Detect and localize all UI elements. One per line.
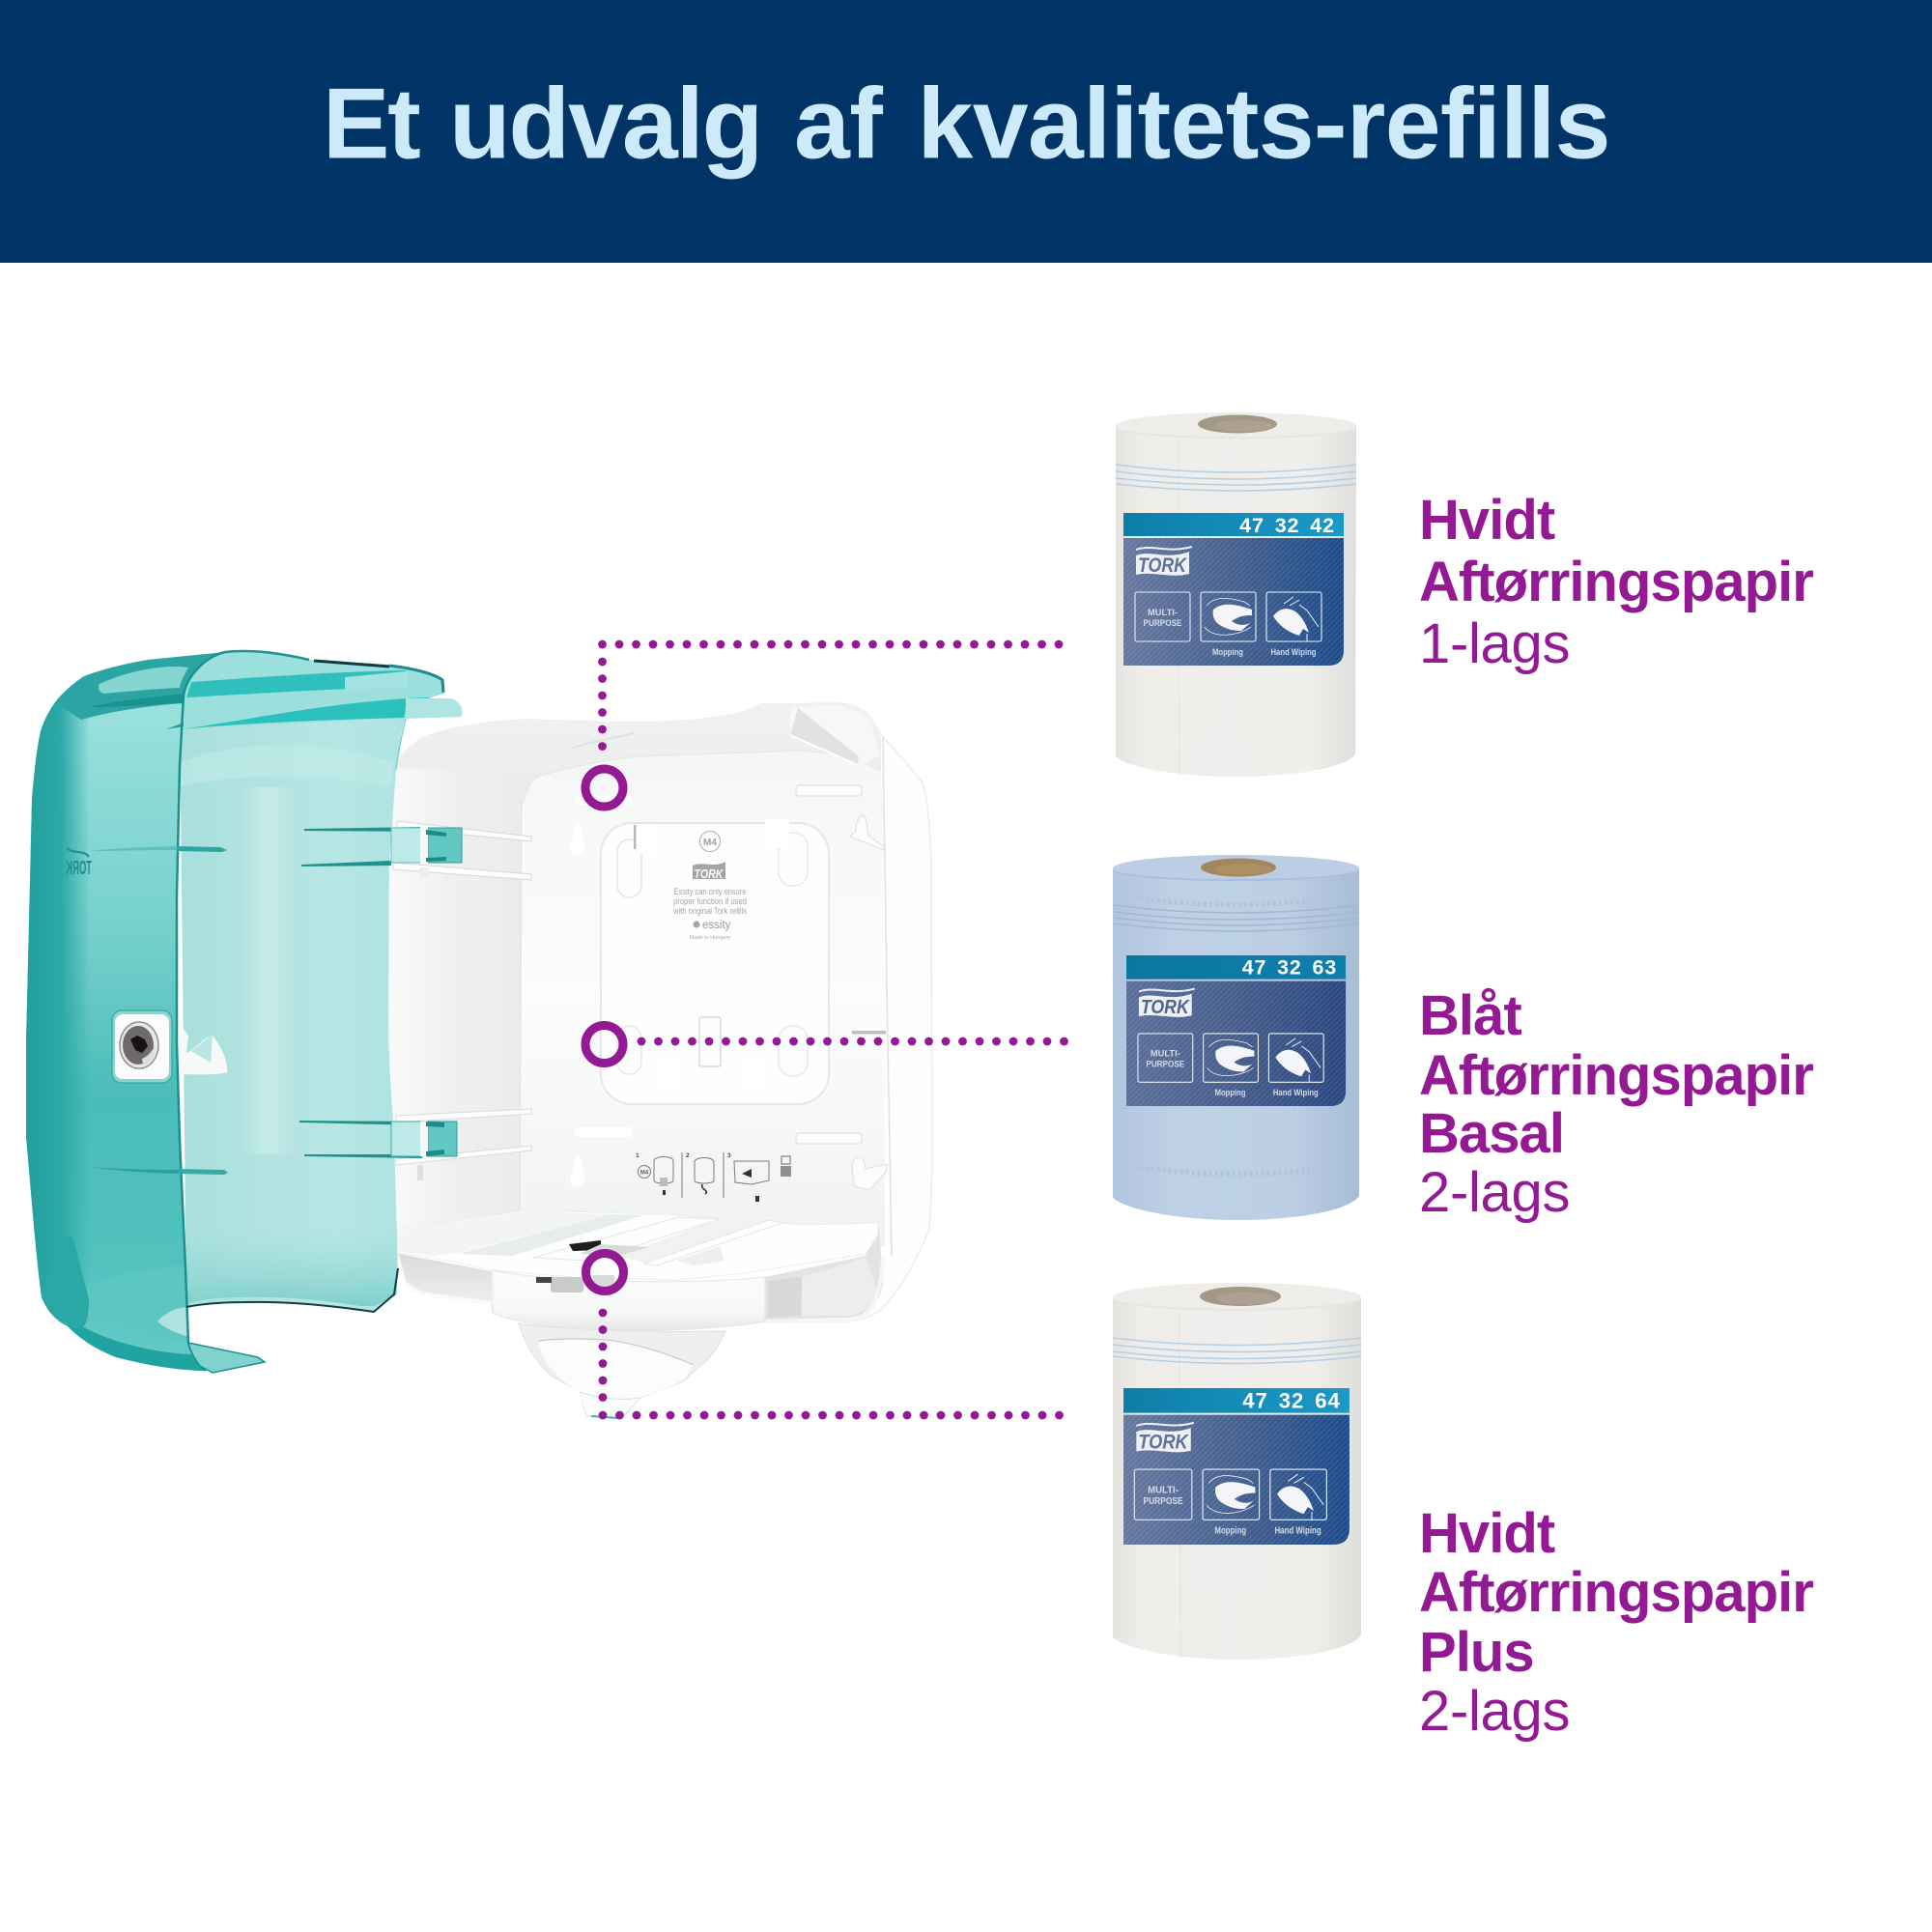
title: udvalg: [449, 68, 761, 180]
product text 1: Hvidt: [1419, 489, 1555, 552]
product label 3: MULTI-: [1148, 1486, 1179, 1496]
product label 2: PURPOSE: [1146, 1059, 1184, 1068]
product label 2: Mopping: [1215, 1087, 1246, 1097]
product label 3: 47 32 64: [1242, 1389, 1341, 1412]
connector: bottom dotted line to roll 3: [599, 1309, 1064, 1419]
roll 2: blue 47 32 63: [1113, 855, 1359, 1220]
installation steps: M4: [640, 1171, 649, 1177]
right inner panel: [180, 715, 406, 1312]
dispenser illustration: [26, 651, 932, 1418]
connector: middle dotted line to roll 2: [638, 1037, 1068, 1045]
product text 3: [1419, 1502, 1813, 1743]
printed back-plate text: with original Tork refills: [672, 906, 747, 917]
wedge: [790, 705, 881, 766]
product label 1: MULTI-: [1148, 608, 1178, 618]
ring marker bottom: [585, 1254, 624, 1291]
header band: [0, 0, 1932, 263]
product text 1: [1419, 489, 1813, 675]
product label 3: Hand Wiping: [1274, 1526, 1321, 1537]
cover front edge: [177, 652, 225, 1371]
title: kvalitets-refills: [918, 68, 1610, 180]
product text 2: Blåt: [1419, 984, 1521, 1047]
lower arch edge: [186, 1268, 398, 1312]
printed back-plate text: M4: [703, 838, 717, 848]
teal transparent cover: [26, 651, 463, 1373]
connector: top dotted line to roll 1: [598, 640, 1063, 751]
product text 1: Aftørringspapir: [1419, 551, 1813, 613]
title: Et: [323, 68, 420, 180]
product label 1: PURPOSE: [1144, 618, 1182, 629]
product label 3: [1123, 1388, 1350, 1545]
top rim: [225, 651, 309, 660]
spout collar: [493, 1270, 765, 1330]
installation steps: 2: [686, 1152, 690, 1159]
cover logo: [66, 848, 92, 879]
product label 3: TORK: [1138, 1431, 1189, 1454]
product text 3: Plus: [1419, 1621, 1534, 1684]
latch hook: [180, 1024, 227, 1074]
product text 3: 2-lags: [1419, 1680, 1570, 1743]
tab: [404, 698, 463, 719]
product text 2: Basal: [1419, 1102, 1564, 1165]
product label 2: Hand Wiping: [1273, 1087, 1319, 1097]
lock: [112, 1010, 172, 1083]
product label 3: Mopping: [1214, 1526, 1246, 1537]
product label 1: 47 32 42: [1239, 514, 1335, 537]
product text 3: Aftørringspapir: [1419, 1561, 1813, 1624]
left edge band: [26, 676, 89, 1326]
printed back-plate text: Essity can only ensure: [674, 887, 746, 897]
roll 3: white 47 32 64: [1113, 1283, 1361, 1660]
tray: [386, 1210, 879, 1280]
installation steps: [636, 1152, 791, 1202]
printed back-plate text: proper function if used: [673, 896, 747, 907]
product text 2: Aftørringspapir: [1419, 1044, 1813, 1107]
left wall: [26, 652, 225, 1371]
roll 1: white 47 32 42: [1116, 412, 1356, 777]
product label 2: MULTI-: [1151, 1048, 1180, 1059]
product label 1: TORK: [1138, 554, 1188, 577]
top cap: [184, 651, 443, 728]
cover ledges: [90, 846, 177, 851]
product text 2: 2-lags: [1419, 1161, 1570, 1224]
title: af: [794, 68, 883, 180]
under tray right: [765, 1225, 883, 1320]
slots and keyholes: [576, 796, 633, 805]
product label 1: Hand Wiping: [1271, 647, 1317, 658]
product label 3: PURPOSE: [1144, 1496, 1183, 1507]
left inner wall: [388, 768, 541, 1232]
rear wall: [521, 751, 885, 1246]
mounting back plate: [601, 823, 829, 1104]
product label 2: 47 32 63: [1242, 956, 1337, 980]
product label 1: [1123, 513, 1344, 666]
shoulder: [55, 652, 225, 720]
printed back-plate text: Made in Hungary: [690, 935, 730, 941]
product label 2: TORK: [1141, 996, 1190, 1018]
product text 1: 1-lags: [1419, 612, 1570, 675]
installation steps: 3: [727, 1152, 731, 1159]
dispenser illustration: TORK: [66, 858, 92, 879]
cutout reflection: [157, 1307, 189, 1337]
printed back-plate text: TORK: [694, 867, 724, 881]
top inner wall: [390, 703, 881, 840]
product text 2: [1419, 984, 1813, 1224]
under tray left: [399, 1254, 492, 1304]
product label 2: [1126, 955, 1346, 1106]
product label 1: Mopping: [1212, 647, 1243, 658]
spout funnel: [519, 1323, 725, 1418]
dispenser back housing: [386, 703, 932, 1418]
hinge arms: [304, 827, 422, 832]
printed back-plate text: [672, 831, 747, 941]
ring marker top: [585, 769, 623, 807]
product text 3: Hvidt: [1419, 1502, 1555, 1565]
ring marker middle: [585, 1026, 623, 1063]
printed back-plate text: essity: [702, 920, 731, 931]
installation steps: 1: [636, 1152, 639, 1159]
rails: [397, 821, 531, 841]
bottom band of left wall: [87, 1265, 188, 1343]
